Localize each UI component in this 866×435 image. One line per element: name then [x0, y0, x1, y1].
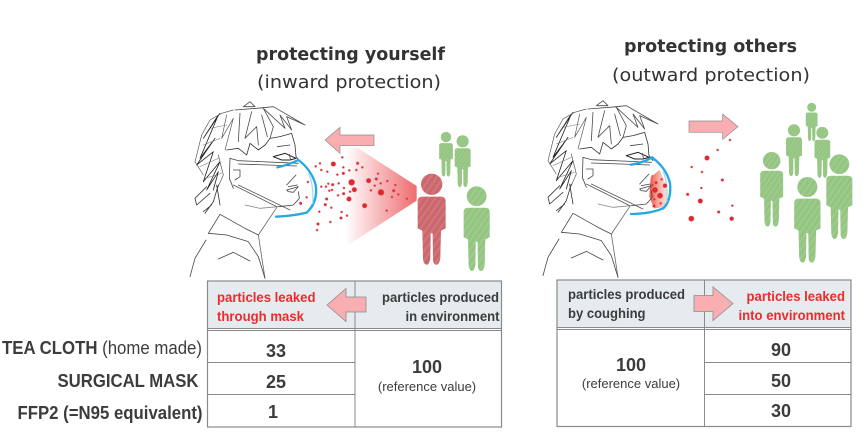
icon: red person: [418, 174, 446, 265]
icon: blue mask outline: [631, 157, 670, 214]
icon: green people: [439, 132, 490, 271]
table: outward protection: [557, 280, 851, 426]
particles: [299, 156, 408, 231]
values: 33: [266, 341, 286, 361]
reference value: [378, 357, 476, 394]
header: particles leaked through mask: through mask: [217, 308, 304, 324]
title: protecting yourself: (inward protection): [257, 72, 441, 93]
values: [771, 340, 791, 421]
arrow: rightward header arrow: [694, 287, 733, 320]
row labels: TEA CLOTH (home made): [2, 338, 202, 358]
icon: head with mask: [543, 101, 658, 277]
arrow: pointing outward: [689, 114, 738, 139]
values: 90: [771, 340, 791, 360]
title: protecting others: (outward protection): [612, 65, 810, 86]
reference value: 100: [616, 355, 646, 375]
icon: green people: [760, 103, 852, 263]
values: 30: [771, 401, 791, 421]
row labels: [2, 338, 202, 423]
reference value: [582, 355, 680, 391]
header: particles produced in environment: particles produced: [382, 289, 499, 305]
particles: [651, 139, 734, 221]
header: particles produced by coughing: by coughing: [568, 305, 646, 321]
reference value: (reference value): [582, 376, 680, 391]
header: particles leaked through mask: [217, 289, 316, 324]
values: 1: [268, 402, 278, 422]
row labels: FFP2 (=N95 equivalent): [18, 403, 202, 423]
reference value: 100: [412, 357, 442, 377]
illustration: outward protection: [543, 101, 852, 277]
header: particles produced in environment: in environment: [406, 308, 500, 324]
title: protecting yourself: protecting yourself: [256, 44, 445, 65]
row labels: SURGICAL MASK: [58, 371, 198, 391]
header: particles leaked into environment: [738, 288, 845, 323]
header: particles leaked through mask: particles leaked: [217, 289, 316, 305]
header: particles leaked into environment: into environment: [738, 307, 845, 323]
values: 25: [266, 372, 286, 392]
red patch inside mask: [649, 170, 668, 208]
title: protecting yourself: [256, 44, 445, 93]
arrow: leftward header arrow: [327, 288, 366, 322]
header: particles produced in environment: [382, 289, 500, 324]
title: protecting others: protecting others: [624, 36, 797, 57]
icon: blue mask outline: [276, 160, 316, 217]
header: particles leaked into environment: particles leaked: [746, 288, 845, 304]
icon: head with mask: [190, 102, 305, 278]
arrow: pointing to wearer: [325, 127, 374, 153]
title: protecting others: [612, 36, 810, 86]
values: 50: [771, 371, 791, 391]
header: particles produced by coughing: particles produced: [568, 286, 685, 302]
values: [266, 341, 286, 422]
illustration: inward protection: [190, 102, 490, 278]
table: inward protection: [208, 281, 502, 427]
reference value: (reference value): [378, 379, 476, 394]
particle cone: [346, 148, 417, 247]
header: particles produced by coughing: [568, 286, 685, 321]
